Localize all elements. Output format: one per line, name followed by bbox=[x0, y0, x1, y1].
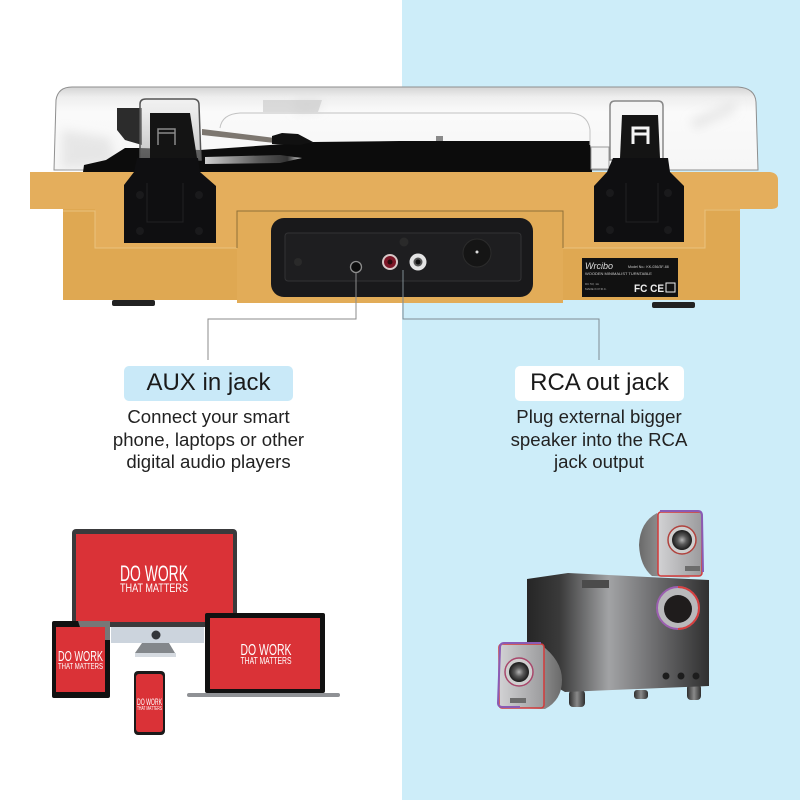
right satellite speaker bbox=[639, 511, 703, 578]
laptop bbox=[187, 613, 340, 697]
text block: RCA description: jack output bbox=[553, 451, 645, 472]
rating label: Wrcibo bbox=[585, 261, 613, 271]
rating label: MADE IN P.R.C. bbox=[585, 287, 607, 291]
heading: RCA out jack: RCA out jack bbox=[530, 369, 670, 396]
rating label: WOODEN MINIMALIST TURNTABLE bbox=[585, 271, 652, 276]
power socket bbox=[463, 239, 491, 267]
rating label: Model No.: KK-036/3F-88 bbox=[628, 265, 669, 269]
dust cover bbox=[54, 87, 758, 170]
wood top plate bbox=[30, 172, 778, 248]
centre panel bbox=[237, 211, 563, 303]
wood seams bbox=[63, 210, 740, 248]
connector line: RCA bbox=[403, 270, 599, 360]
text block: AUX description: Connect your smart bbox=[127, 406, 290, 427]
turntable bbox=[30, 87, 778, 308]
phone bbox=[134, 671, 165, 735]
laptop: DO WORK bbox=[240, 642, 292, 659]
hinge left bbox=[124, 99, 216, 243]
phone: DO WORK bbox=[137, 697, 162, 707]
tablet bbox=[52, 621, 110, 698]
laptop: THAT MATTERS bbox=[240, 656, 292, 667]
desktop monitor: THAT MATTERS bbox=[120, 581, 188, 595]
rating label: DC 5V, 1A bbox=[585, 282, 599, 286]
text block: RCA description: Plug external bigger bbox=[516, 406, 682, 427]
tablet: DO WORK bbox=[58, 648, 103, 665]
hinge right bbox=[594, 101, 684, 242]
text block: AUX description: phone, laptops or other bbox=[113, 429, 304, 450]
text block: AUX description: digital audio players bbox=[126, 451, 291, 472]
control plate bbox=[271, 218, 533, 297]
heading: AUX in jack bbox=[124, 366, 293, 401]
tonearm and platter bbox=[83, 100, 609, 172]
connector line: AUX bbox=[208, 273, 356, 360]
tablet: THAT MATTERS bbox=[58, 661, 103, 671]
RCA red jack bbox=[382, 254, 398, 270]
lid reflections bbox=[62, 100, 735, 168]
desktop monitor bbox=[72, 529, 237, 657]
icon: speakers bbox=[498, 511, 709, 709]
foot right bbox=[652, 302, 695, 308]
background: right panel bbox=[402, 0, 800, 800]
foot left bbox=[112, 300, 155, 306]
desktop monitor: DO WORK bbox=[120, 561, 188, 586]
icon: devices bbox=[52, 529, 340, 735]
text block: RCA description: speaker into the RCA bbox=[511, 429, 688, 450]
heading: AUX in jack: AUX in jack bbox=[146, 369, 272, 396]
RCA white jack bbox=[410, 254, 426, 270]
wood body bbox=[63, 205, 740, 300]
left satellite speaker bbox=[498, 643, 562, 709]
AUX jack bbox=[350, 262, 362, 272]
subwoofer bbox=[527, 573, 709, 707]
phone: THAT MATTERS bbox=[137, 706, 162, 712]
rating label bbox=[582, 258, 678, 297]
rating label: FC CE bbox=[634, 283, 664, 295]
heading: RCA out jack bbox=[515, 366, 684, 401]
